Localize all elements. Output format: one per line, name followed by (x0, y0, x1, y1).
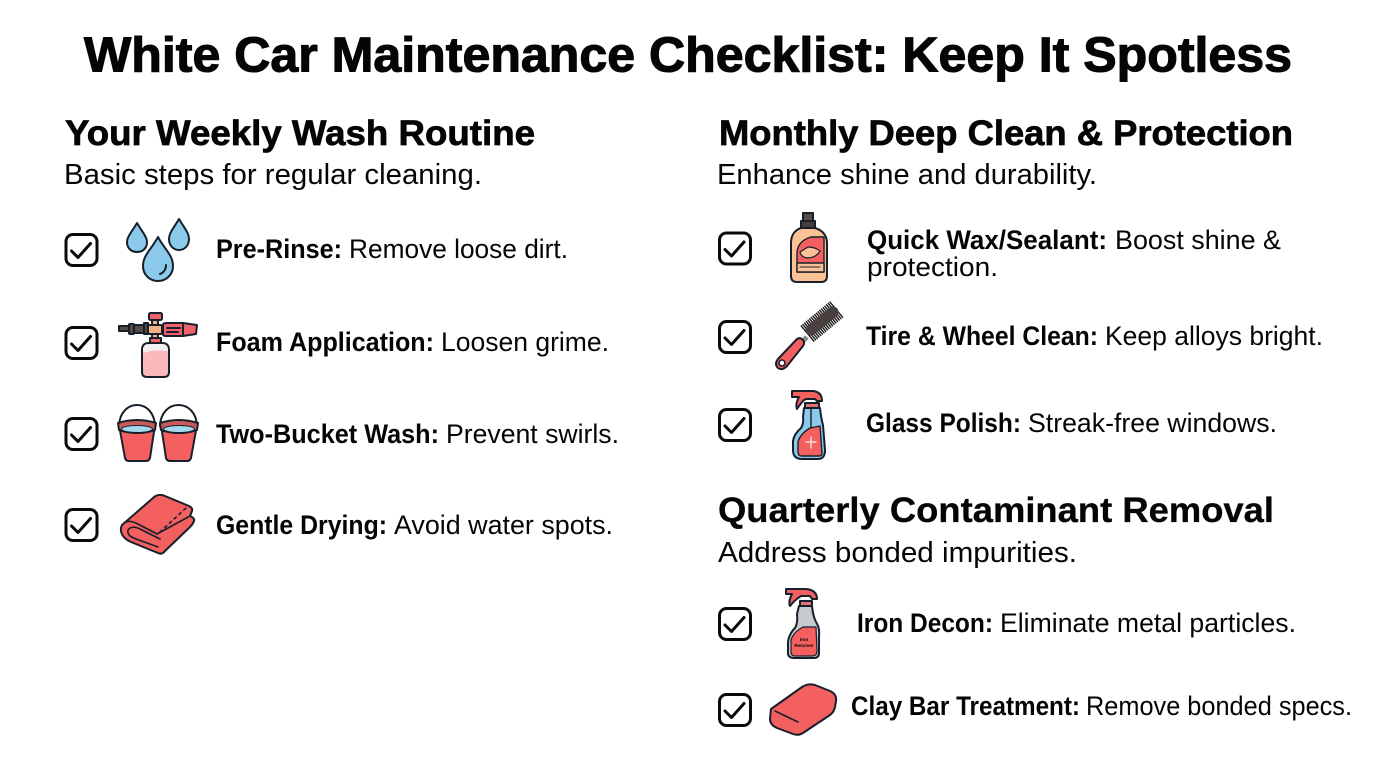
checkbox: two-bucket wash (66, 418, 97, 450)
checkbox: glass polish (720, 410, 750, 440)
icon: water drops (127, 219, 189, 281)
label: clay bar: Clay Bar Treatment: (851, 691, 1080, 721)
icon: wheel brush (776, 309, 837, 369)
label: quick wax (867, 225, 1281, 282)
subheading: monthly: Enhance shine and durability. (717, 159, 1097, 191)
icon: foam cannon (119, 313, 197, 377)
label: tire and wheel: Tire & Wheel Clean: (866, 321, 1098, 351)
label: tire and wheel (866, 321, 1323, 351)
title: White Car Maintenance Checklist: Keep It Spotless (84, 28, 1292, 82)
label: quick wax: protection. (867, 252, 998, 282)
label: pre-rinse: Remove loose dirt. (349, 234, 568, 264)
label: glass polish: Glass Polish: (866, 408, 1021, 438)
label: foam application: Foam Application: (216, 327, 434, 357)
panel: quarterly contaminant removal (718, 491, 1352, 735)
icon: two buckets (118, 405, 198, 461)
label: glass polish: Streak-free windows. (1028, 408, 1277, 438)
panel: monthly deep clean (717, 114, 1323, 459)
checkbox: pre-rinse (66, 234, 97, 266)
label: quick wax: Boost shine & (1115, 225, 1281, 255)
label: foam application (216, 327, 609, 357)
checkbox: gentle drying (66, 510, 97, 540)
label: glass polish (866, 408, 1277, 438)
checkbox: quick wax (720, 233, 750, 264)
label: gentle drying: Avoid water spots. (394, 510, 613, 540)
checkbox: clay bar (720, 694, 750, 726)
subheading: quarterly: Address bonded impurities. (718, 537, 1077, 569)
label: iron decon: Eliminate metal particles. (1000, 608, 1296, 638)
label: pre-rinse: Pre-Rinse: (216, 234, 342, 264)
checkbox: foam application (66, 328, 97, 358)
icon: clay bar (770, 684, 836, 735)
label: pre-rinse (216, 234, 568, 264)
label: foam application: Loosen grime. (441, 327, 609, 357)
label: two-bucket wash: Two-Bucket Wash: (216, 419, 439, 449)
icon: blue spray bottle (792, 391, 825, 459)
label: clay bar (851, 691, 1352, 721)
icon: folded towel (121, 495, 194, 554)
heading: quarterly: Quarterly Contaminant Removal (718, 491, 1274, 530)
label: clay bar: Remove bonded specs. (1086, 691, 1352, 721)
label: gentle drying (216, 510, 613, 540)
bottle label text: Iron (800, 637, 808, 642)
label: iron decon: Iron Decon: (857, 608, 993, 638)
heading: monthly: Monthly Deep Clean & Protection (719, 114, 1293, 153)
label: tire and wheel: Keep alloys bright. (1105, 321, 1323, 351)
heading: weekly wash: Your Weekly Wash Routine (65, 114, 535, 153)
checkbox: iron decon (720, 608, 750, 640)
label: iron decon (857, 608, 1296, 638)
icon: wax bottle (791, 213, 827, 282)
checkbox: tire and wheel (720, 322, 750, 352)
label: gentle drying: Gentle Drying: (216, 510, 387, 540)
panel: weekly wash routine (64, 114, 619, 554)
icon: grey spray bottle (786, 589, 819, 658)
subheading: weekly wash: Basic steps for regular cleaning. (64, 159, 482, 191)
label: two-bucket wash: Prevent swirls. (446, 419, 619, 449)
label: quick wax: Quick Wax/Sealant: (867, 225, 1107, 255)
bottle label text: Remover (794, 643, 814, 648)
label: two-bucket wash (216, 419, 619, 449)
